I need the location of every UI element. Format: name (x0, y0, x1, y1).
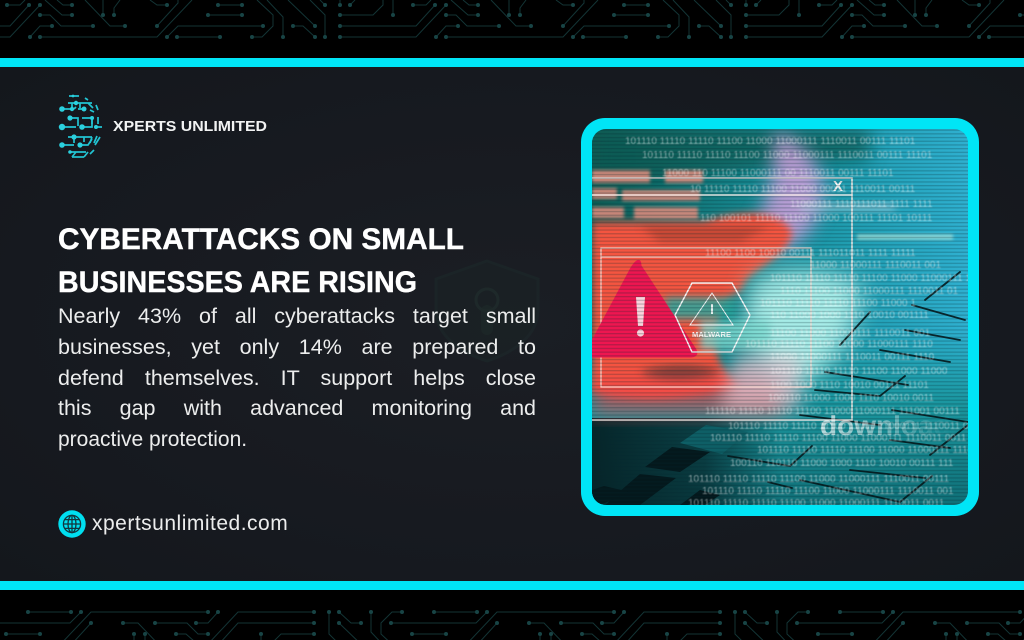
icon: globe (58, 510, 86, 538)
binary text lines: 11000 11000111 1110011 001 (810, 260, 941, 271)
cyan frame (581, 118, 979, 516)
panel: cyber alert image (581, 118, 979, 516)
close x: X (833, 178, 843, 195)
circuit pattern band: top (0, 0, 1024, 39)
binary text lines: 101110 11110 11100 11000 11000111 1110 (745, 339, 933, 350)
photo background (592, 129, 968, 505)
logo wordmark: XPERTS UNLIMITED (113, 119, 267, 135)
title: BUSINESSES ARE RISING (58, 266, 417, 299)
body text: proactive protection. (58, 428, 247, 451)
cyan bar: top (0, 58, 1024, 67)
malware hexagon badge: MALWARE (692, 330, 731, 339)
body text: Nearly 43% of all cyberattacks target small (58, 304, 536, 328)
large window outline (592, 178, 852, 420)
binary text lines: 111110 11110 11110 11100 11000 11000111 111001 00111 (705, 406, 960, 417)
pink haze (745, 130, 823, 250)
body text (58, 304, 536, 451)
binary text lines: 101110 11110 11110 11100 11000 11000 (770, 366, 948, 377)
binary text lines (625, 136, 990, 509)
binary text lines: 101110 11110 11110 11100 11000 11000111 1110011 001 (728, 421, 979, 432)
circuit pattern band: bottom (0, 610, 1024, 640)
binary text lines: 101110 11110 11110 11100 11000 1 (760, 298, 916, 309)
binary text lines: 100110 11000 1000 1110 10010 0011 (768, 393, 934, 404)
body text: businesses, yet only 14% are prepared to (58, 335, 536, 359)
binary text lines: 101110 11110 11110 11100 11000 11000111 1110011 0011 (710, 433, 967, 444)
binary text lines: 1100 1000 1110 10010 00111 11101 (770, 380, 929, 391)
binary text lines: 11000111 1110111011 1111 1111 (790, 199, 933, 210)
binary text lines: 10 11110 11110 11100 11000 00011 1110011 00111 (690, 184, 916, 195)
red warning triangle (585, 261, 696, 356)
watermark: shield with padlock (474, 288, 500, 334)
keyboard gaps (728, 272, 968, 502)
binary text lines: 101110 11110 11110 11100 11000 11000111 1110011 00111 11101 (625, 136, 916, 147)
binary text lines: 101110 11110 11110 11100 11000 11000111 1110011 00111 11101 (642, 150, 933, 161)
title (58, 223, 464, 299)
cyan white glow (744, 270, 860, 388)
body text: defend themselves. IT support helps close (58, 366, 536, 390)
binary text lines: 11000 110 11100 11000111 00 1110011 00111 11101 (662, 168, 894, 179)
binary text lines: 101110 11110 11110 11100 11000 11000111 1110011 001 (702, 486, 954, 497)
top dark band (592, 129, 870, 185)
binary text lines: 1110 11100 11000 11000111 1110011 01 (780, 286, 959, 297)
scanlines (592, 129, 968, 505)
keyboard keys (592, 447, 720, 505)
red glow (592, 213, 792, 399)
binary text lines: 11100 1100 10010 00111 111011011 1111 11111 (705, 248, 916, 259)
logo: circuit globe (58, 94, 102, 158)
malware hexagon badge (675, 283, 750, 352)
streak right of window (857, 234, 953, 240)
binary text lines: 110 11000 1000 1110 10010 001111 (770, 310, 929, 321)
small window outline (601, 248, 811, 387)
binary text lines: 110 100101 11110 11100 11000 100111 11101 10111 (700, 213, 933, 224)
website url: xpertsunlimited.com (92, 512, 288, 535)
download word: download (820, 410, 951, 441)
title: CYBERATTACKS ON SMALL (58, 223, 464, 256)
blurred screen letters (592, 170, 703, 219)
binary text lines: 11100 11000 11000111 1110011 001 (770, 328, 931, 339)
cyan bar: bottom (0, 581, 1024, 590)
binary text lines: 101110 11110 11110 11100 11000 11000111 1110011 00111 (688, 474, 950, 485)
body text: this gap with advanced monitoring and (58, 396, 536, 420)
binary text lines: 100110 110110 11000 1000 1110 10010 00111 111 (730, 458, 954, 469)
binary text lines: 11000 11000111 1110011 00111 1110 (770, 352, 935, 363)
binary text lines: 101110 11110 11110 11100 11000 11000111 1110011 0011 (688, 498, 945, 509)
